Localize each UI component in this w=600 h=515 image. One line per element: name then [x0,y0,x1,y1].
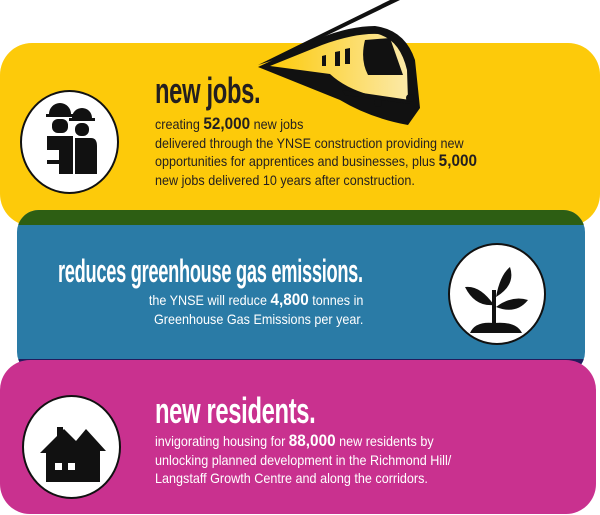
text: residents: unlocking planned development in the Richmond Hill/ [155,452,451,468]
panel: new jobs [0,43,600,226]
icon: workers circle [20,90,119,194]
icon: plant circle [448,243,546,345]
text: greenhouse [148,290,363,327]
icon: train [258,0,420,125]
heading: new residents: new residents. [155,390,315,431]
panel: greenhouse [17,210,585,374]
text: residents [155,431,452,486]
text: greenhouse: the YNSE will reduce 4,800 tonnes in [148,290,363,309]
text: residents: Langstaff Growth Centre and along the corridors. [155,470,428,486]
panel: new residents [0,360,596,514]
text: jobs [155,114,477,188]
text: jobs: new jobs delivered 10 years after construction. [155,172,415,188]
icon: house circle [22,395,121,499]
text: jobs: delivered through the YNSE construction providing new [155,134,464,150]
text: greenhouse: Greenhouse Gas Emissions per year. [154,310,363,326]
heading: new jobs: new jobs. [155,70,260,111]
text: residents: invigorating housing for 88,000 new residents by [155,431,434,450]
text: jobs: opportunities for apprentices and businesses, plus 5,000 [155,151,477,170]
heading: greenhouse: reduces greenhouse gas emissions. [58,253,363,289]
text: jobs: creating 52,000 new jobs [155,114,303,133]
